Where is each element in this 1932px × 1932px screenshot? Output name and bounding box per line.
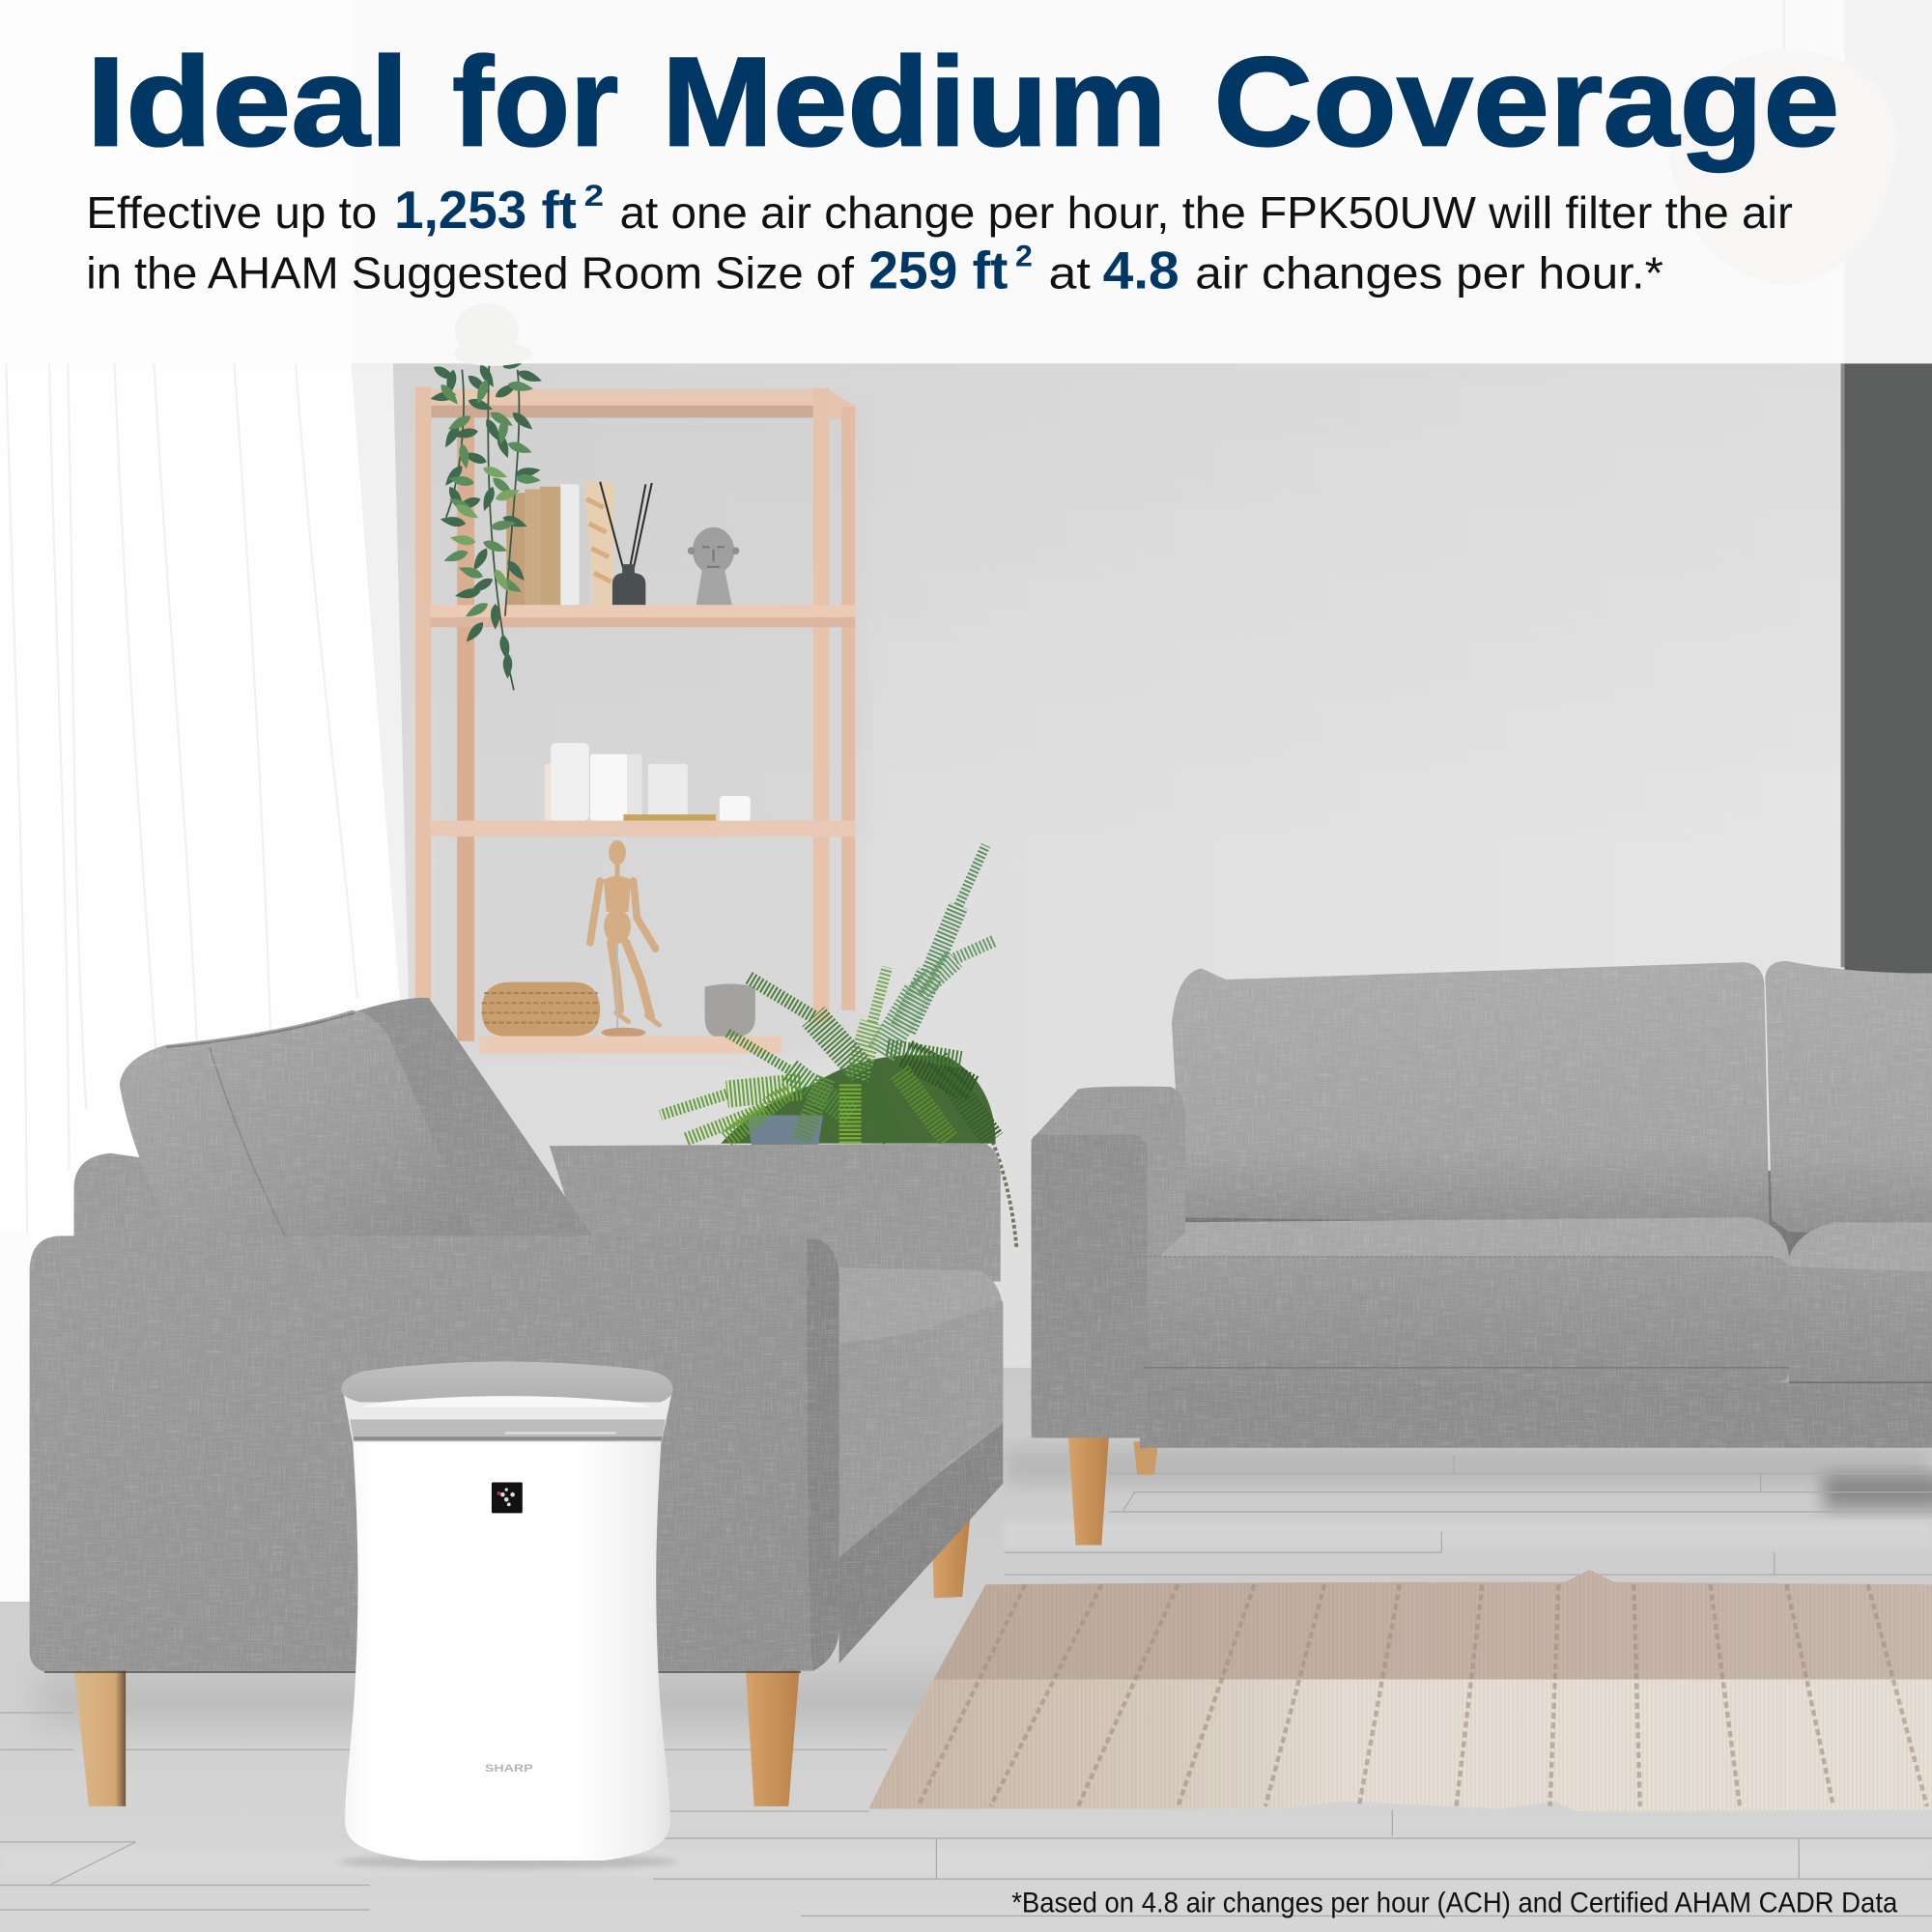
shelf objects: reed diffuser (600, 482, 652, 605)
wall (0, 357, 1932, 1380)
curtain (0, 363, 409, 1602)
header band (0, 0, 1932, 366)
sofa: left, front arm (30, 1236, 839, 1671)
shelf objects: wooden mannequin (590, 840, 659, 1037)
fern plant (661, 845, 1016, 1247)
hanging plant (430, 354, 544, 690)
description line 2: 4.8 (1103, 240, 1179, 299)
footnote: *Based on 4.8 air changes per hour (ACH) and Certified AHAM CADR Data (1011, 1888, 1898, 1919)
purifier logo: SHARP (485, 1763, 533, 1775)
shelf objects: books (506, 480, 613, 605)
air purifier (337, 1361, 678, 1869)
purifier vent band (344, 1395, 671, 1441)
description line 1: Effective up to (86, 187, 377, 238)
rug (868, 1570, 1932, 1811)
title: Medium (662, 31, 1167, 173)
sofa: right (1032, 961, 1932, 1545)
description line 2: 2 (1015, 239, 1033, 273)
title: Ideal (86, 31, 409, 173)
sofa underside shadow line (44, 1671, 801, 1673)
description line 1: 1,253 ft (394, 180, 577, 240)
purifier badge (492, 1482, 523, 1513)
description line 2: at (1048, 247, 1091, 298)
title: Coverage (1213, 31, 1839, 173)
purifier body (345, 1435, 670, 1861)
description line 1: at one air change per hour, the FPK50UW will filter the air (620, 187, 1793, 238)
pillows: left sofa (120, 998, 596, 1242)
title: for (452, 31, 618, 173)
description line 1: 2 (584, 178, 604, 213)
shelf objects: grey cup (705, 983, 755, 1037)
shelf objects: stone head (688, 527, 739, 605)
shelf (415, 387, 867, 1057)
description line 2: 259 ft (868, 240, 1008, 299)
shelf objects: woven basket (482, 982, 600, 1037)
description line 2: air changes per hour.* (1195, 247, 1663, 298)
shelf objects: candles and tray (545, 743, 751, 822)
sofa: left, rear section (74, 1144, 1003, 1663)
purifier lid (341, 1361, 672, 1403)
sofa legs: left sofa (74, 1509, 971, 1806)
description line 2: in the AHAM Suggested Room Size of (86, 247, 854, 298)
floor (0, 1368, 1932, 1932)
